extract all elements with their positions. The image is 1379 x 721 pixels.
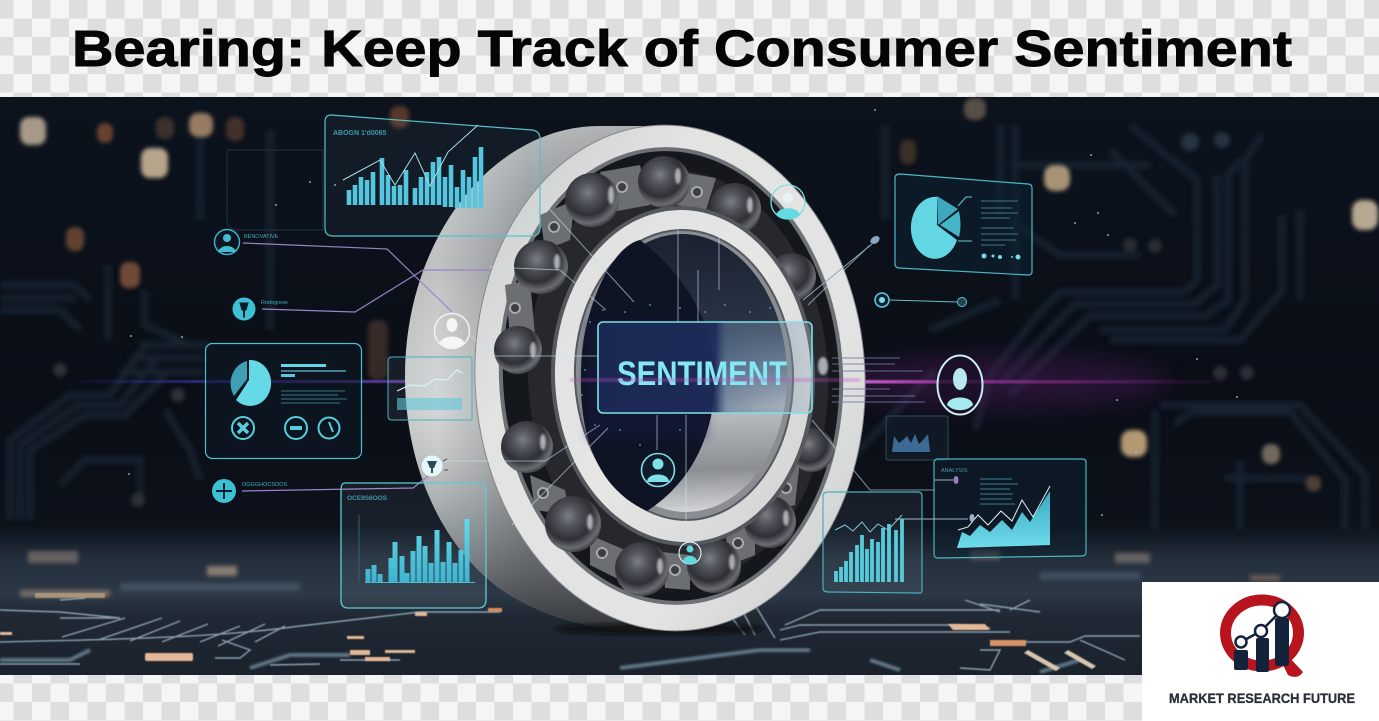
SENTIMENT label: SENTIMENT bbox=[617, 355, 787, 393]
panel heading: ANALYSIS bbox=[941, 468, 968, 474]
panel: left pie panel bbox=[206, 344, 362, 458]
icon label: Rodegrese bbox=[261, 300, 288, 306]
bearing race floor bbox=[517, 162, 839, 590]
connector lines over bearing bbox=[440, 192, 935, 530]
person icon right bbox=[938, 356, 982, 414]
connector nodes bbox=[935, 479, 953, 481]
pie chart bbox=[911, 196, 972, 259]
panel: lower right bar chart bbox=[823, 492, 922, 593]
person icon in bore bbox=[642, 454, 674, 486]
checkered header background bbox=[0, 0, 1379, 97]
panel: top left bar chart bbox=[325, 115, 540, 236]
inner ring chamfer bbox=[570, 226, 798, 524]
steel balls bbox=[494, 156, 834, 596]
legend dots bbox=[982, 254, 1020, 260]
logo card bbox=[1142, 582, 1379, 721]
logo mark: magnifier with rising bars bbox=[1226, 600, 1303, 677]
circuit board ground bbox=[0, 550, 1280, 672]
panel: lower left bar chart bbox=[341, 483, 486, 608]
panel: faint ghost panel bbox=[227, 150, 323, 230]
status icons bbox=[232, 417, 340, 439]
SENTIMENT callout box bbox=[598, 322, 812, 413]
data text near flare bbox=[832, 358, 925, 402]
checkered footer background bbox=[0, 675, 1379, 721]
blurred circuit traces background bbox=[0, 125, 1365, 530]
panel heading: OCE9S6OOS bbox=[347, 495, 388, 502]
panel heading: ABOGN 1'd0065 bbox=[333, 130, 387, 137]
ground contact shadow bbox=[555, 623, 765, 635]
pin icon on cylinder bbox=[422, 456, 448, 476]
icon label: OGGGHOCSOOS bbox=[242, 482, 288, 488]
bore data sparkle bbox=[581, 304, 771, 446]
logo wordmark: MARKET RESEARCH FUTURE bbox=[1169, 691, 1355, 706]
user icon 1 left bbox=[214, 230, 279, 254]
bearing race groove bbox=[489, 140, 853, 612]
flare across callout bbox=[570, 378, 860, 382]
plus icon lower left bbox=[212, 479, 288, 503]
bearing outer cylinder wall bbox=[405, 126, 680, 631]
bars bbox=[349, 147, 481, 208]
sparkle particles bbox=[128, 109, 1238, 516]
legend text lines bbox=[981, 201, 1018, 245]
small node connector bbox=[875, 293, 966, 307]
trend lines bbox=[343, 125, 478, 186]
purple light flare bbox=[60, 356, 1250, 408]
ball bearing bbox=[405, 115, 935, 641]
ball highlights bbox=[530, 168, 828, 574]
cage plates and rivets bbox=[505, 165, 800, 590]
bearing inner ring bbox=[547, 204, 819, 548]
panel: right pie panel bbox=[895, 174, 1032, 275]
bore dark section bbox=[581, 240, 715, 511]
bars bbox=[836, 519, 902, 582]
legend bars bbox=[281, 364, 326, 367]
blurred bokeh lights bbox=[20, 98, 1378, 507]
title: Bearing: Keep Track of Consumer Sentiment bbox=[72, 20, 1292, 77]
panel: middle line chart bbox=[388, 357, 472, 420]
pin icon left bbox=[232, 298, 288, 320]
pie chart bbox=[231, 360, 271, 406]
bearing outer ring face bbox=[462, 115, 878, 641]
left connector lines bbox=[242, 243, 490, 491]
leaf node connector bbox=[803, 234, 881, 300]
person icon on outer ring top bbox=[771, 185, 805, 220]
bars bbox=[368, 519, 467, 582]
person icon on outer ring bottom bbox=[679, 542, 701, 564]
panel: right area chart bbox=[895, 459, 1086, 558]
bore interior bbox=[576, 230, 792, 516]
area chart bbox=[957, 491, 1050, 548]
panel: small area chart bbox=[886, 416, 948, 460]
text lines bbox=[980, 479, 1018, 504]
bore purple tint bbox=[585, 320, 710, 440]
person icon on cylinder bbox=[434, 314, 470, 348]
icon label: BENOVATIVE bbox=[244, 234, 279, 240]
